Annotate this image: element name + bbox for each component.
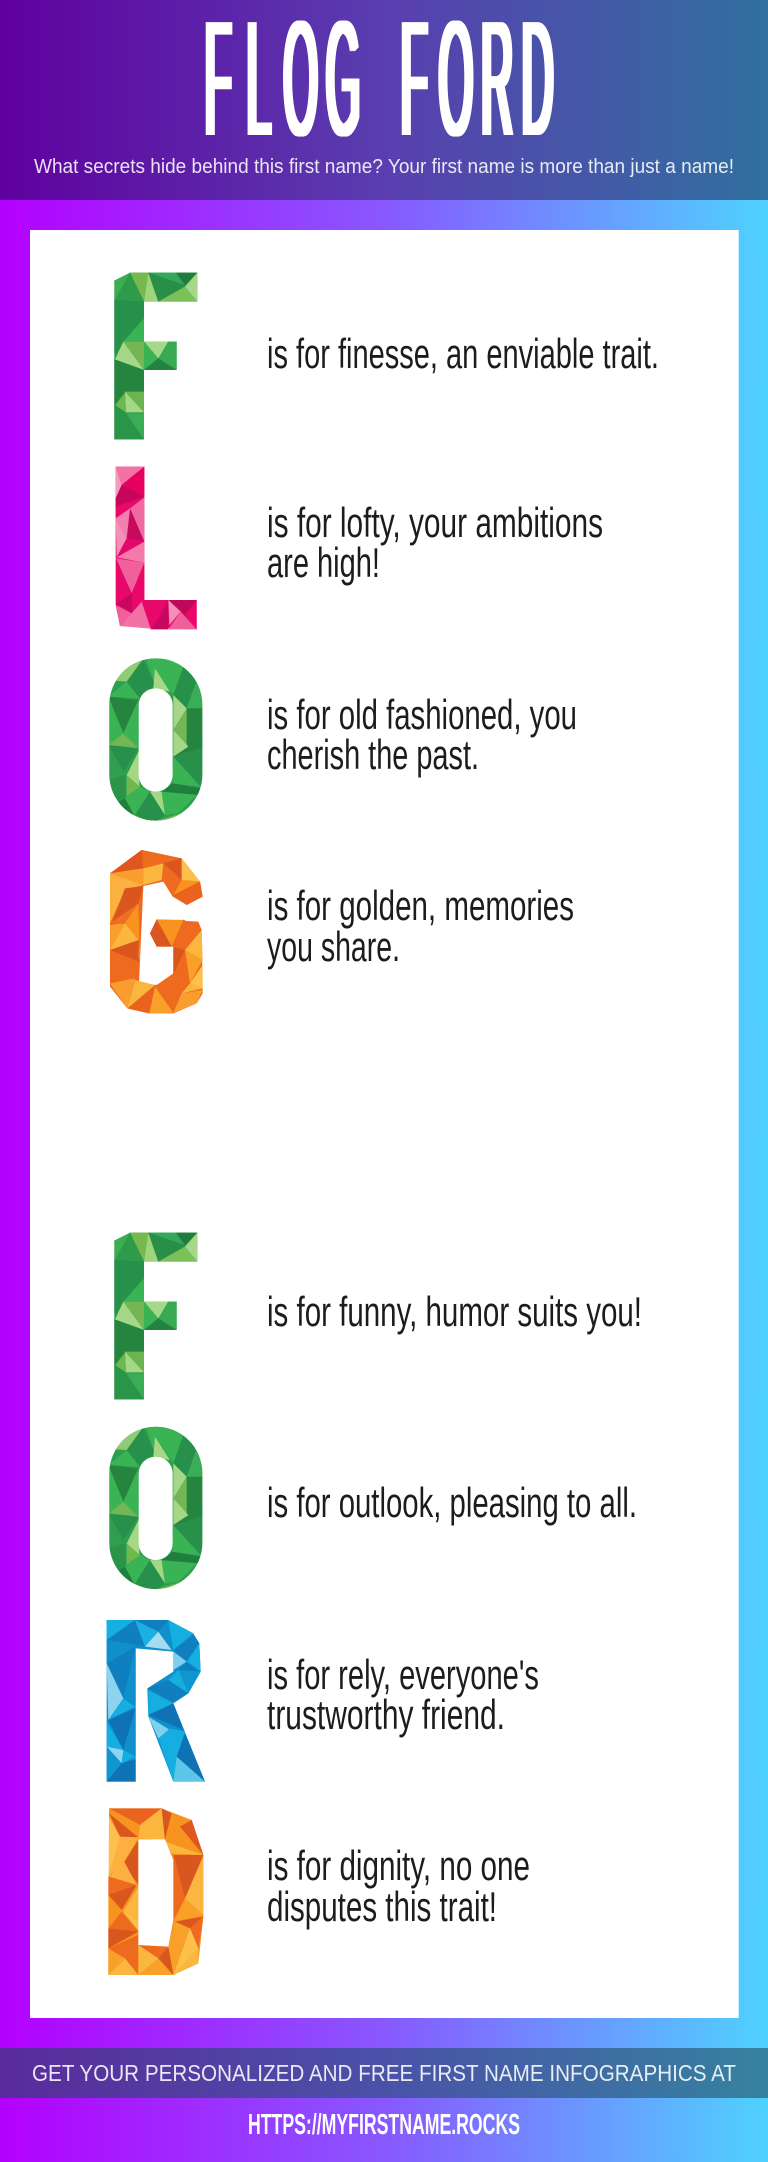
subtitle: What secrets hide behind this first name? Your first name is more than just a name! bbox=[34, 156, 734, 178]
footer url: HTTPS://MYFIRSTNAME.ROCKS bbox=[248, 2109, 520, 2141]
text: G meaning: you share. bbox=[267, 923, 400, 970]
footer band bbox=[0, 2048, 768, 2098]
icon: letter L bbox=[116, 467, 197, 629]
icon: letter G bbox=[110, 850, 203, 1013]
text: O meaning: cherish the past. bbox=[267, 731, 479, 778]
text: R meaning bbox=[267, 1651, 539, 1738]
panel: white content card bbox=[30, 230, 739, 2018]
text: O meaning bbox=[267, 691, 577, 778]
text: G meaning: is for golden, memories bbox=[267, 882, 574, 929]
icon: letter O bbox=[107, 655, 205, 823]
text: L meaning bbox=[267, 499, 603, 586]
text: L meaning: is for lofty, your ambitions bbox=[267, 499, 603, 546]
text: R meaning: is for rely, everyone's bbox=[267, 1651, 539, 1698]
text: D meaning: is for dignity, no one bbox=[267, 1842, 530, 1889]
text: R meaning: trustworthy friend. bbox=[267, 1691, 505, 1738]
text: D meaning: disputes this trait! bbox=[267, 1883, 497, 1930]
icon: letter F second word bbox=[114, 1233, 197, 1399]
icon: letter F bbox=[114, 273, 197, 439]
icon: letter O second word bbox=[107, 1423, 205, 1592]
icon: letter D bbox=[108, 1808, 203, 1975]
text: G meaning bbox=[267, 882, 574, 970]
text: L meaning: are high! bbox=[267, 539, 380, 586]
text: O meaning: is for old fashioned, you bbox=[267, 691, 577, 738]
icon: letter R bbox=[107, 1620, 205, 1782]
text: D meaning bbox=[267, 1842, 530, 1930]
header band bbox=[0, 0, 768, 200]
